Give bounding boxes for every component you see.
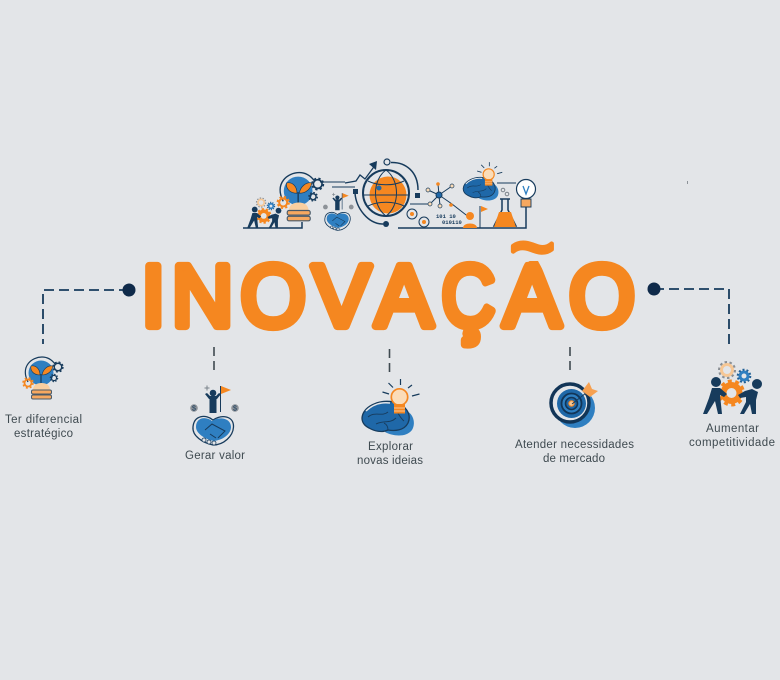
binary text: 010110 [442,219,462,226]
label: Explorar [368,441,413,453]
icon: globe [353,159,420,227]
icon: heart handshake: $ [233,406,237,412]
label: Atender necessidades [515,439,634,451]
title: O [569,248,635,345]
item: atender [515,382,634,465]
icon: person and flag [463,206,488,228]
item: ter diferencial [5,357,82,440]
connector: gerar valor [213,347,215,371]
title: A [375,248,433,345]
icon: target [551,382,598,428]
icon: team with gears [703,362,762,414]
connector: explorar [388,349,390,373]
label: Gerar valor [185,450,245,462]
icon: brain with bulb [362,379,420,436]
title: ~ [510,202,555,290]
item: aumentar [689,362,775,449]
label: competitividade [689,437,775,449]
icon: plant bulb small [277,173,323,221]
title: V [312,248,371,345]
title [145,240,635,349]
icon: heart handshake: $ [192,406,196,412]
item: explorar [357,379,423,467]
title: O [241,248,306,345]
label: Ter diferencial [5,414,82,426]
label: Aumentar [706,423,759,435]
icon: heart handshake [190,386,239,445]
icon: light bulb [516,180,536,207]
label: novas ideias [357,455,423,467]
icon: flask [494,188,516,227]
connector: atender [569,347,571,370]
icon: network [410,182,470,218]
icon: brain small [463,162,502,201]
banner illustration [243,159,536,230]
icon: plant bulb [23,357,63,399]
icon: team with gears small [247,198,281,228]
binary text [436,213,462,226]
label: estratégico [14,428,73,440]
connector: left [43,284,136,344]
title: Ç [442,248,495,345]
label: de mercado [543,453,605,465]
icon: heart small [323,193,354,230]
icon: hexagons [407,209,429,227]
item: gerar valor [185,386,245,462]
binary text: 101 10 [436,213,456,220]
title: I [141,248,165,345]
stray dot [687,181,688,184]
title: Ã [503,248,561,345]
title: N [172,248,233,345]
connector: right [648,282,729,344]
icon: growth arrow [345,161,377,183]
